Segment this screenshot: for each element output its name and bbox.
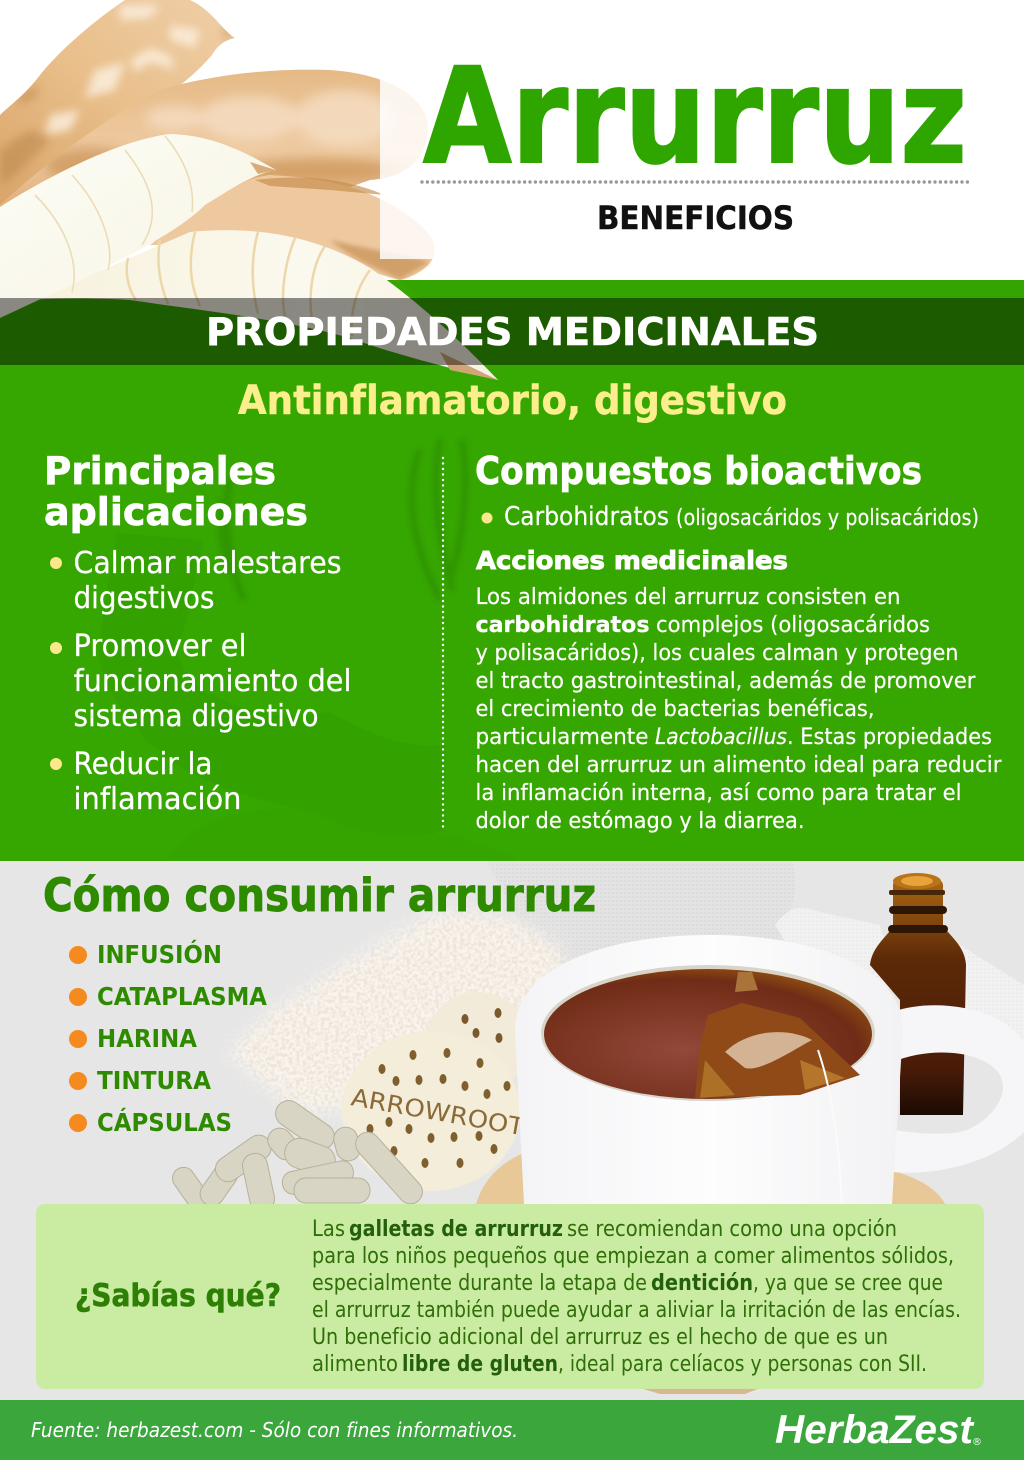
callout text: para los niños pequeños que empiezan a comer alimentos sólidos, — [312, 1244, 954, 1269]
list item: tincture: TINTURA — [97, 1066, 212, 1095]
footer bar — [0, 1400, 1024, 1460]
heading: how to consume: Cómo consumir arrurruz — [43, 869, 596, 922]
root: white upper — [0, 134, 276, 318]
subtitle: BENEFICIOS — [597, 199, 794, 237]
illustration: arrowroot cookies — [342, 992, 530, 1191]
heading: medicinal properties: PROPIEDADES MEDICINALES — [206, 310, 819, 354]
list item: poultice: CATAPLASMA — [97, 982, 268, 1011]
logo: HerbaZest — [775, 1408, 975, 1452]
root: tan top — [0, 0, 240, 210]
callout text — [312, 1217, 961, 1377]
illustration: amber bottle — [870, 873, 966, 1115]
illustration: arrowroot roots — [0, 0, 498, 380]
list: ways to consume — [69, 939, 268, 1137]
compound item — [482, 502, 979, 532]
illustration: capsules — [168, 1095, 427, 1215]
callout text: Las — [312, 1217, 345, 1242]
callout text: Un beneficio adicional del arrurruz es el hecho de que es un — [312, 1325, 888, 1350]
callout text: especialmente durante la etapa de — [312, 1271, 647, 1296]
dark band — [0, 298, 1024, 365]
illustration: tea mug — [515, 935, 1024, 1204]
list item 3 — [50, 747, 242, 817]
callout background — [36, 1204, 984, 1389]
list item 3: Reducir la — [74, 747, 212, 782]
illustration: wooden coaster — [476, 1150, 945, 1204]
callout text: , ideal para celíacos y personas con SII. — [558, 1352, 927, 1377]
list item 3: inflamación — [74, 782, 242, 817]
background: grey section — [0, 860, 1024, 1400]
text block: medicinal actions: el tracto gastrointestinal, además de promover — [476, 669, 976, 694]
cookie lettering: ARROWROOT — [349, 1083, 527, 1141]
background: white header — [0, 0, 1024, 280]
text block: medicinal actions: la inflamación interna, así como para tratar el — [476, 781, 962, 806]
illustration: towel — [487, 861, 1024, 1060]
list item 1: digestivos — [74, 581, 214, 616]
root: white lower — [20, 230, 498, 380]
illustration: flour pile — [225, 910, 570, 1115]
source note: Fuente: herbazest.com - Sólo con fines informativos. — [31, 1418, 518, 1442]
text block: medicinal actions: complejos (oligosacáridos — [656, 613, 930, 638]
dotted divider under title — [422, 180, 968, 184]
heading: medicinal actions: Acciones medicinales — [476, 546, 788, 575]
tea bag — [695, 1003, 860, 1098]
list item: capsules: CÁPSULAS — [97, 1108, 232, 1137]
compound item: Carbohidratos — [504, 502, 669, 532]
text block: medicinal actions: particularmente — [476, 725, 648, 750]
list item 1: Calmar malestares — [74, 546, 342, 581]
list item 2: funcionamiento del — [74, 664, 352, 699]
coaster edge below callout — [640, 1388, 760, 1394]
text block: medicinal actions: el crecimiento de bacterias benéficas, — [476, 697, 874, 722]
woman silhouette background — [99, 440, 520, 860]
root: tan lower — [150, 175, 435, 280]
green rule above grey section — [0, 859, 1024, 861]
registered mark: ® — [972, 1437, 982, 1448]
cookie: front — [342, 1031, 520, 1191]
list item: flour: HARINA — [97, 1024, 198, 1053]
callout: did you know — [36, 1204, 984, 1389]
mug body — [515, 935, 903, 1204]
text block: medicinal actions: y polisacáridos), los cuales calman y protegen — [476, 641, 958, 666]
text block: medicinal actions: dolor de estómago y la diarrea. — [476, 809, 804, 834]
heading: main applications — [44, 449, 308, 534]
callout text: galletas de arrurruz — [349, 1217, 563, 1242]
background: green band — [0, 280, 1024, 860]
text block: medicinal actions: Los almidones del arrurruz consisten en — [476, 585, 900, 610]
tea bag string — [818, 1050, 842, 1204]
text block: medicinal actions: hacen del arrurruz un alimento ideal para reducir — [476, 753, 1002, 778]
list item 2: Promover el — [74, 629, 246, 664]
heading: bioactive compounds: Compuestos bioactivos — [475, 449, 922, 493]
callout text: , ya que se cree que — [753, 1271, 943, 1296]
callout text: alimento — [312, 1352, 398, 1377]
footer — [0, 1400, 1024, 1460]
text block: medicinal actions — [476, 585, 1002, 834]
root: tan large — [0, 70, 428, 207]
mug handle — [893, 1005, 1024, 1173]
tea — [544, 969, 872, 1099]
translucent white title panel — [380, 0, 1024, 259]
compound item: (oligosacáridos y polisacáridos) — [676, 506, 979, 531]
text block: medicinal actions: carbohidratos — [476, 613, 650, 638]
list item 2: sistema digestivo — [74, 699, 318, 734]
cookie: back — [426, 992, 530, 1092]
heading: main applications: aplicaciones — [44, 490, 308, 534]
panel: main applications — [44, 449, 352, 817]
text block: medicinal actions: . Estas propiedades — [787, 725, 992, 750]
text block: medicinal actions: Lactobacillus — [655, 725, 787, 750]
callout heading: ¿Sabías qué? — [75, 1278, 281, 1314]
dotted column divider — [442, 458, 444, 830]
mug interior shading — [541, 965, 875, 1101]
panel: bioactive compounds — [475, 449, 1002, 834]
heading: main applications: Principales — [44, 449, 276, 493]
callout text: dentición — [651, 1271, 753, 1296]
band: top green strip — [398, 280, 1024, 298]
list item 2 — [50, 629, 352, 734]
list item 1 — [50, 546, 342, 616]
callout text: libre de gluten — [402, 1352, 558, 1377]
subheading: properties: Antinflamatorio, digestivo — [238, 378, 787, 424]
callout text: se recomiendan como una opción — [567, 1217, 897, 1242]
list item: infusion: INFUSIÓN — [97, 939, 222, 969]
